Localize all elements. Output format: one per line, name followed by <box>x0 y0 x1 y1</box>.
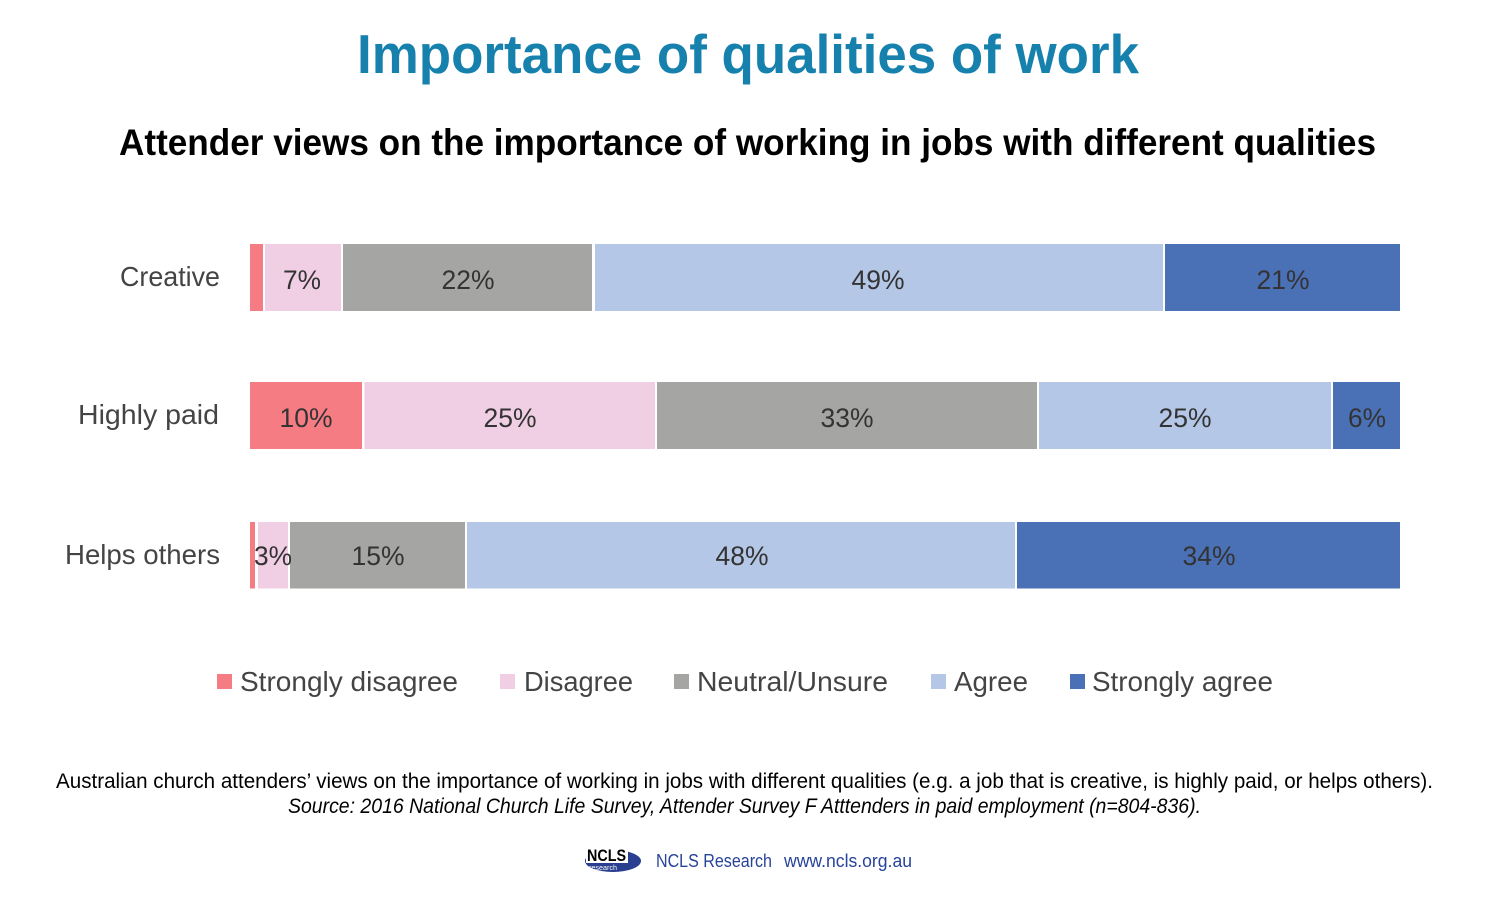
row: Helps others: 34% <box>1182 541 1236 571</box>
row: Creative: 7% <box>283 265 321 295</box>
stacked bar chart <box>65 244 1400 588</box>
row: Highly paid <box>78 382 1400 449</box>
icon: NCLS logo <box>585 846 641 872</box>
source text: Source: 2016 National Church Life Survey, Attender Survey F Atttenders in paid employment (n=804-836). <box>288 795 1201 818</box>
row: Highly paid: 25% <box>1158 403 1212 433</box>
footer: organisation name: NCLS Research <box>656 851 772 871</box>
legend item: Agree: Agree <box>954 666 1028 697</box>
row: Helps others <box>65 522 1400 588</box>
caption text: Australian church attenders’ views on the importance of working in jobs with different qualities (e.g. a job that is creative, is highly paid, or helps others). <box>56 770 1433 793</box>
category label: Helps others: Helps others <box>65 539 220 570</box>
row: Helps others: 15% <box>352 541 404 571</box>
row: Creative: 49% <box>852 265 904 295</box>
row: Helps others: 3% <box>254 541 292 571</box>
legend item: Strongly agree: Strongly agree <box>1092 666 1273 697</box>
row: Creative: 21% <box>1256 265 1310 295</box>
row: Creative: 22% <box>442 265 494 295</box>
title: Importance of qualities of work <box>357 23 1139 85</box>
row: Highly paid: 6% <box>1348 403 1386 433</box>
footer: website: www.ncls.org.au <box>783 851 912 871</box>
icon: NCLS logo: NCLS <box>587 846 626 865</box>
subtitle: Attender views on the importance of working in jobs with different qualities <box>119 122 1376 163</box>
category label: Creative: Creative <box>120 261 220 292</box>
row: Highly paid: 25% <box>484 403 536 433</box>
legend item: Neutral/Unsure: Neutral/Unsure <box>697 666 888 697</box>
legend item: Disagree: Disagree <box>524 666 633 697</box>
row: Highly paid: 10% <box>280 403 332 433</box>
icon: NCLS logo: research <box>589 865 617 872</box>
legend <box>217 666 1273 697</box>
row: Creative <box>120 244 1400 311</box>
category label: Highly paid: Highly paid <box>78 399 219 430</box>
row: Highly paid: 33% <box>820 403 874 433</box>
legend item: Strongly disagree: Strongly disagree <box>240 666 458 697</box>
row: Helps others: 48% <box>716 541 768 571</box>
